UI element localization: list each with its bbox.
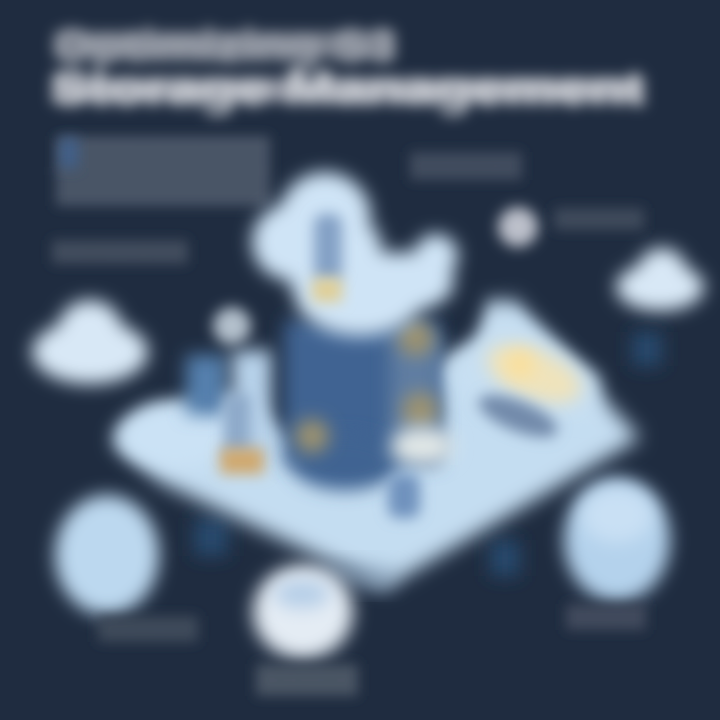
- intro paragraph: Lifecycle policies and cost control: [54, 163, 270, 180]
- platform base: [112, 296, 640, 588]
- cream highlight low: [390, 426, 454, 466]
- small left tower: [186, 307, 272, 474]
- caption: top right label: Access tiers: [412, 157, 520, 174]
- icon: cloud right: [616, 248, 704, 311]
- intro paragraph: Storage classes overview: [84, 139, 270, 156]
- platform left lobe: [117, 404, 233, 468]
- caption: Glacier: [568, 609, 645, 625]
- caption: [98, 616, 198, 642]
- central blue cylinder: [284, 320, 440, 465]
- icon: round dot and label: Monitoring: [556, 211, 640, 227]
- icon: round dot and label: [498, 207, 644, 247]
- caption: top right label: [410, 152, 522, 180]
- cloud body: [252, 172, 458, 336]
- intro text block: [54, 136, 270, 206]
- caption: left label: Data organization: [52, 244, 188, 261]
- caption: Archive: [258, 672, 356, 689]
- small blue cylinder front: [388, 474, 420, 518]
- intro paragraph: [54, 136, 270, 206]
- circle: left bottom: [55, 495, 198, 642]
- platform lower shadow: [300, 560, 400, 592]
- title: [50, 20, 645, 116]
- caption: [566, 604, 646, 630]
- isometric platform: [112, 296, 640, 592]
- title: Optimizing S3: [52, 20, 397, 73]
- cloud glyph column: [314, 214, 342, 282]
- small dark squares: [194, 332, 662, 576]
- gold dots on cylinder: [295, 320, 438, 453]
- circle: bottom center: [253, 565, 358, 696]
- caption: Standard: [100, 621, 196, 637]
- icon: intro bullet: [60, 138, 78, 168]
- caption: left label: [52, 240, 188, 264]
- right card: [445, 296, 600, 446]
- gold cloud accent: [312, 278, 342, 302]
- title: Storage Management: [50, 60, 645, 116]
- circle: right bottom: [564, 478, 670, 630]
- icon: cloud left: [32, 300, 148, 384]
- top cloud with storage: [252, 172, 458, 336]
